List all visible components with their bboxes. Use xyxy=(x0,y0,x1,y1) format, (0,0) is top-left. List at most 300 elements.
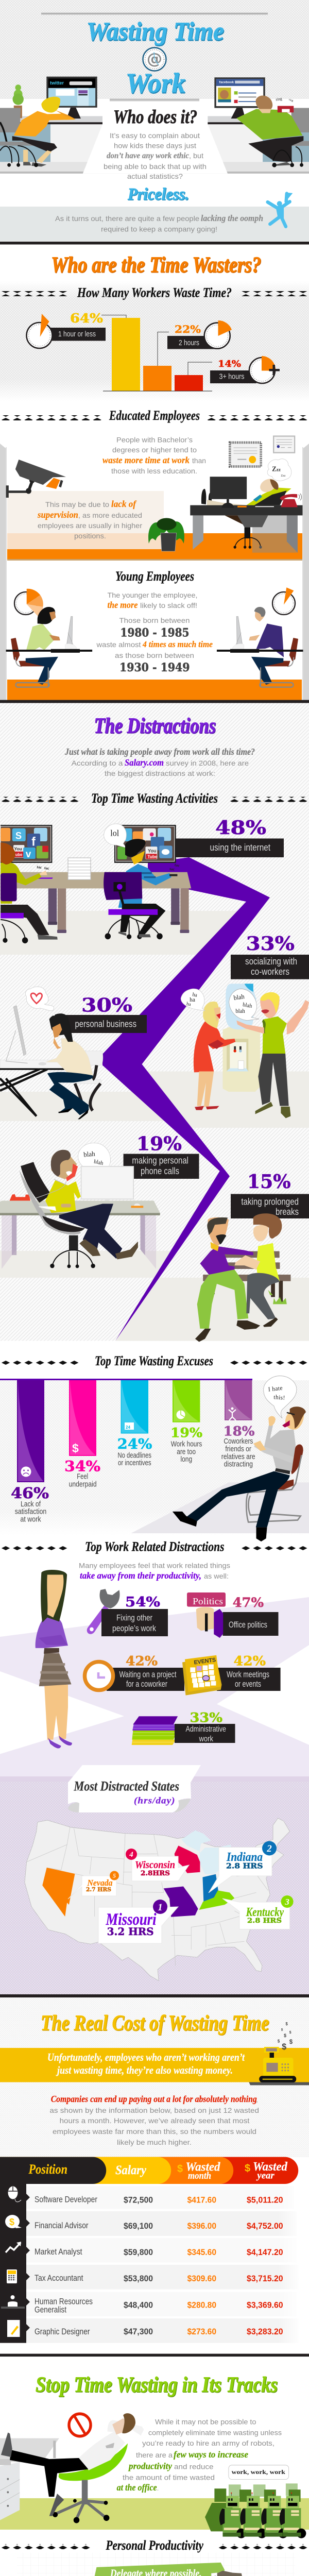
woman with yellow top xyxy=(234,1213,282,1330)
robots army xyxy=(205,2483,306,2538)
floor: orange xyxy=(7,491,302,561)
callout: Wisconsin: 2.8HRS xyxy=(141,1870,170,1877)
panel: oomph band: required to keep a company going! xyxy=(101,225,217,233)
stat: 54% fixing other people's work: Fixing other xyxy=(116,1613,152,1623)
stat: 15% prolonged breaks xyxy=(231,1171,309,1218)
row: Market Analyst: Market Analyst xyxy=(35,2247,82,2257)
man xyxy=(31,1150,138,1259)
table: cost of wasted time xyxy=(0,2157,301,2343)
older man's desk xyxy=(217,649,303,653)
Missouri xyxy=(164,1886,198,1917)
chair xyxy=(246,1445,303,1522)
stat: 19% phone calls: phone calls xyxy=(141,1166,179,1176)
text: companies pay out: likely be much higher. xyxy=(117,2138,192,2146)
icon: paper stack xyxy=(132,1716,178,1745)
text: younger employees: 4 times as much time xyxy=(142,639,213,649)
stat: 47% office politics: Politics xyxy=(193,1596,223,1606)
stat: 24% no deadlines: 24% xyxy=(117,1436,152,1452)
stat: 18% coworkers xyxy=(221,1423,255,1468)
stat: 19% phone calls: 19% xyxy=(136,1133,182,1155)
chair xyxy=(20,1162,95,1268)
left monitor: ube xyxy=(15,852,23,857)
floor: young employees xyxy=(7,680,302,700)
text: younger employees: The younger the employee, xyxy=(107,591,198,599)
icon: events calendar xyxy=(182,1655,222,1696)
row: Human Resources Generalist: $280.80 xyxy=(187,2300,216,2310)
sidebar icons: $ xyxy=(9,2217,14,2227)
sleeping man xyxy=(201,476,291,549)
stat: 24% no deadlines: or incentives xyxy=(118,1459,151,1467)
text: intro paragraph xyxy=(104,131,207,180)
row: Software Developer: Software Developer xyxy=(35,2194,97,2204)
water cooler xyxy=(222,984,260,1092)
text: intro paragraph: don’t have any work ethic xyxy=(107,151,189,160)
text: intro paragraph: actual statistics? xyxy=(127,172,183,180)
icon: cash register with dollars: $ xyxy=(289,2039,293,2045)
divider bar xyxy=(0,2354,309,2357)
label: 2 hours xyxy=(167,320,232,349)
stat: 33% administrative work: Administrative xyxy=(185,1725,226,1734)
man xyxy=(1,2413,144,2516)
text: robots paragraph: . xyxy=(157,2484,159,2492)
left worker xyxy=(1,842,58,943)
panel: yellow banner: just wasting time, they’re also wasting money. xyxy=(56,2064,233,2076)
background: lavender rays xyxy=(0,1597,309,1777)
left monitor: v xyxy=(26,849,31,860)
right monitor xyxy=(114,825,176,863)
icon: fist and cuff xyxy=(196,1607,223,1638)
Wisconsin xyxy=(175,1845,200,1873)
stat: 47% office politics: 47% xyxy=(233,1595,264,1610)
man xyxy=(173,1406,306,1541)
ribbon shapes xyxy=(48,2563,265,2576)
no sign xyxy=(69,2414,91,2436)
left monitor: You xyxy=(14,846,22,851)
text: lack of supervision: , as more educated xyxy=(78,511,142,519)
stat: 24% no deadlines: No deadlines xyxy=(117,1451,151,1460)
person: man on phone leaning on desk: ring xyxy=(288,98,294,103)
illustration: security camera, plant, sleeping manager xyxy=(6,436,302,553)
callout: Missouri: 1 xyxy=(158,1902,163,1913)
panel: oomph band xyxy=(0,207,309,241)
stat: 54% fixing other people's work: 54% xyxy=(125,1595,160,1610)
stat: 18% coworkers: friends or xyxy=(225,1445,251,1453)
illustration: woman on personal business xyxy=(0,987,103,1119)
text: distractions intro: Just what is taking people away from work all this time? xyxy=(64,747,255,757)
row: Graphic Designer: $47,300 xyxy=(124,2327,153,2336)
text: intro paragraph: , but xyxy=(189,151,203,160)
table header: Position xyxy=(28,2162,67,2177)
heading: Who does it?: Who does it? xyxy=(113,107,197,128)
text: intro paragraph: being able to back that up with xyxy=(104,162,207,171)
icon: cash register with dollars: $ xyxy=(286,2022,288,2026)
header panel xyxy=(0,0,309,99)
left monitor: f xyxy=(31,835,36,849)
left monitor: S xyxy=(15,830,22,841)
country outline xyxy=(25,1818,290,1981)
row: Human Resources Generalist: $48,400 xyxy=(124,2300,153,2310)
stat: 15% prolonged breaks: 15% xyxy=(247,1171,290,1193)
icon: cash register with dollars: $ xyxy=(278,2039,280,2043)
label: 1 hour or less xyxy=(27,314,106,348)
stat: 47% office politics: Office politics xyxy=(229,1620,267,1630)
row: Graphic Designer: $273.60 xyxy=(187,2327,216,2336)
row: Graphic Designer xyxy=(35,2327,283,2336)
speech bubble: I hate this xyxy=(264,1376,297,1418)
stat: 15% prolonged breaks: taking prolonged xyxy=(241,1196,299,1207)
stat: 34% feel underpaid: underpaid xyxy=(69,1480,97,1489)
speech bubble: lol xyxy=(104,824,126,848)
speech bubble: ha ha ha: ha xyxy=(190,996,196,1003)
monitor: facebook: facebook xyxy=(219,81,234,84)
stat: 33% socializing: co-workers xyxy=(251,967,289,977)
stat: 19% work hours xyxy=(170,1426,202,1464)
stat: 33% administrative work: 33% xyxy=(190,1710,222,1725)
icon: clock with small wedge xyxy=(272,587,295,615)
bar: 46% xyxy=(17,1380,44,1482)
bar: 64% xyxy=(112,318,140,391)
stat: 19% work hours: 19% xyxy=(170,1426,202,1440)
thought bubble: Zzz xyxy=(267,459,291,481)
bar chart: hours wasted xyxy=(27,311,280,391)
desk with stack of papers xyxy=(17,858,191,933)
right worker: tac xyxy=(174,862,180,868)
speech bubble: blah blah blah xyxy=(229,989,259,1021)
bar: 22% xyxy=(143,366,171,391)
callout: Kentucky: 3 xyxy=(284,1897,289,1907)
subheading: Personal Productivity: Personal Productivity xyxy=(106,2538,203,2553)
text: lack of supervision: This may be due to xyxy=(45,500,109,509)
desk xyxy=(0,1166,160,1269)
background: grid panel xyxy=(17,2553,295,2576)
row: Tax Accountant: $53,800 xyxy=(124,2274,153,2283)
text: younger employees: likely to slack off! xyxy=(140,601,197,609)
row: Financial Advisor: Financial Advisor xyxy=(35,2221,89,2230)
background: cost panel xyxy=(0,1997,309,2157)
section heading: The Real Cost of Wasting Time: The Real Cost of Wasting Time xyxy=(41,2012,269,2036)
stat: 18% coworkers: Coworkers xyxy=(224,1437,253,1446)
text: lack of supervision: employees are usually in higher xyxy=(38,521,142,530)
stat: 30% personal business: personal business xyxy=(75,1019,136,1029)
bar: 34% xyxy=(69,1380,96,1456)
table header: $ xyxy=(177,2163,183,2175)
callout: Nevada: 5 xyxy=(113,1872,116,1879)
icon: cash register with dollars: $ xyxy=(282,2042,286,2052)
callout: Missouri: 3.2 HRS xyxy=(107,1925,153,1938)
tips list xyxy=(48,2563,283,2576)
telephone xyxy=(280,494,301,507)
callout: Nevada xyxy=(68,1871,119,1899)
stat: 48% using the internet xyxy=(176,817,284,857)
panel: oomph band: lacking the oomph xyxy=(201,213,263,223)
stat: 33% administrative work: work xyxy=(199,1735,214,1743)
callout: Indiana xyxy=(209,1841,277,1893)
callout: Wisconsin: 4 xyxy=(129,1851,133,1859)
text: younger employees: the more xyxy=(107,600,138,610)
plant xyxy=(12,84,24,118)
callout: Nevada: Nevada xyxy=(87,1878,113,1888)
label: 1 hour or less: 1 hour or less xyxy=(58,330,96,338)
illustration: socializing at water cooler xyxy=(181,984,309,1118)
row: Financial Advisor: $69,100 xyxy=(124,2221,153,2231)
map panel background xyxy=(0,1776,309,1994)
table header: Wasted xyxy=(185,2161,220,2174)
background: distractions panel xyxy=(0,703,309,1341)
young woman's desk xyxy=(6,649,92,653)
row: Software Developer: $72,500 xyxy=(124,2195,153,2205)
speech bubble: blah blah blah: blah xyxy=(242,1002,253,1009)
text: distractions intro: According to a xyxy=(71,759,123,767)
title: Wasting Time: Wasting Time xyxy=(87,16,224,45)
text: robots paragraph: at the office xyxy=(117,2482,157,2493)
great lakes xyxy=(181,1831,232,1874)
text: companies pay out: employees waste far more than this, so the numbers would xyxy=(53,2127,256,2136)
speech bubble: blah blah: blah xyxy=(83,1149,96,1159)
callout: Wisconsin xyxy=(126,1849,189,1881)
subheading: Top Time Wasting Activities xyxy=(0,791,309,806)
illustration: angry man on chair xyxy=(173,1376,306,1541)
callout: Missouri xyxy=(98,1900,178,1943)
text: distractions intro: the biggest distractions at work: xyxy=(105,769,215,777)
certificates xyxy=(230,436,295,466)
text: younger employees: as those born between xyxy=(115,651,194,659)
row: Tax Accountant: Tax Accountant xyxy=(35,2273,83,2283)
row: Tax Accountant xyxy=(35,2273,283,2283)
stat: 42% work meetings: 42% xyxy=(234,1654,266,1668)
bar: 34%: $ xyxy=(72,1442,79,1455)
plant xyxy=(148,518,184,551)
stat: 19% phone calls xyxy=(124,1133,199,1179)
table header: Wasted xyxy=(253,2160,288,2174)
stat: 18% coworkers: relatives are xyxy=(221,1452,255,1461)
young woman xyxy=(11,607,77,687)
bar: 24%: 24 xyxy=(126,1425,130,1430)
speech bubble: blah blah blah: blah xyxy=(233,993,245,1002)
row: Human Resources Generalist: Human Resources xyxy=(35,2297,93,2306)
panel: oomph band: As it turns out, there are quite a few people xyxy=(55,214,199,223)
stat: 18% coworkers: 18% xyxy=(224,1423,255,1438)
floors behind distractions scenes xyxy=(0,911,309,1341)
row: Market Analyst: $345.60 xyxy=(187,2247,216,2257)
row: Tax Accountant: $309.60 xyxy=(187,2274,216,2283)
text: lack of supervision xyxy=(37,499,142,540)
older man xyxy=(232,607,298,687)
Kentucky xyxy=(199,1890,234,1910)
row: Human Resources Generalist: $3,369.60 xyxy=(247,2300,283,2310)
chair xyxy=(53,2444,128,2523)
illustration: office scene with two slackers xyxy=(0,77,309,174)
row: Market Analyst xyxy=(35,2247,283,2257)
speech bubble: I hate this: this! xyxy=(273,1394,285,1401)
stat: 34% feel underpaid: Feel xyxy=(77,1472,88,1481)
text: work-related intro: as well: xyxy=(204,1572,229,1580)
man in green t-shirt xyxy=(236,992,309,1118)
background: excuses crosshatch xyxy=(0,1380,309,1535)
Indiana xyxy=(202,1874,218,1902)
right worker xyxy=(104,839,180,939)
desk xyxy=(190,477,302,553)
text: intro paragraph: how kids these days just xyxy=(114,141,196,149)
stat: 46% lack of satisfaction: satisfaction xyxy=(15,1507,46,1516)
bar: 14% xyxy=(175,375,203,391)
side walls of room xyxy=(0,444,309,700)
stat: 48% using the internet: 48% xyxy=(215,817,266,839)
text: distractions intro: survey in 2008, here are xyxy=(166,759,249,767)
text: intro paragraph: It’s easy to complain about xyxy=(110,131,200,140)
subheading: Top Time Wasting Excuses xyxy=(0,1353,309,1368)
speech bubble: lol: lol xyxy=(110,828,119,838)
left worker: tac xyxy=(44,866,50,871)
illustration: two people on a bench xyxy=(195,1213,290,1342)
stat: 46% lack of satisfaction: 46% xyxy=(11,1484,49,1502)
center white panel xyxy=(83,99,228,174)
row: Graphic Designer: $3,283.20 xyxy=(247,2327,283,2336)
text: companies pay out: Companies can end up paying out a lot for absolutely nothing xyxy=(51,2094,257,2104)
stat: 15% prolonged breaks: breaks xyxy=(276,1207,299,1217)
text: robots paragraph: While it may not be possible to xyxy=(155,2418,256,2426)
icon: clock with fanned wedges xyxy=(14,589,43,618)
row: Human Resources Generalist: Generalist xyxy=(35,2304,66,2314)
stat: 54% fixing other people's work: people’s work xyxy=(112,1623,156,1633)
value: 64%: 64% xyxy=(70,311,103,326)
thought bubble: heart xyxy=(25,987,55,1016)
callout: Indiana: 2.8 HRS xyxy=(226,1862,263,1871)
speech bubble: blah blah blah: blah xyxy=(235,1008,245,1014)
table header xyxy=(0,2157,298,2184)
callout: Missouri: Missouri xyxy=(106,1910,157,1929)
text: robots paragraph: and reduce xyxy=(174,2463,214,2471)
background: hatch panel behind bars xyxy=(0,281,309,401)
woman xyxy=(45,1013,93,1119)
callout: Indiana: Indiana xyxy=(226,1851,263,1864)
subheading: Top Time Wasting Activities: Top Time Wasting Activities xyxy=(91,791,218,806)
text: bachelor's paragraph xyxy=(102,435,206,475)
banner: Most Distracted States: (hrs/day) xyxy=(134,1795,176,1806)
text: robots paragraph: completely eliminate time wasting unless xyxy=(148,2429,282,2437)
woman in red dress xyxy=(194,1002,235,1110)
stat: 42% waiting on a project: for a coworker xyxy=(126,1679,167,1689)
stat: 46% lack of satisfaction: at work xyxy=(20,1515,41,1524)
row: Financial Advisor: $4,752.00 xyxy=(247,2221,283,2231)
callout: Kentucky: Kentucky xyxy=(246,1906,284,1919)
stat: 54% fixing other people's work xyxy=(87,1589,168,1636)
left monitor xyxy=(1,825,52,863)
text: distractions intro: Salary.com xyxy=(125,757,164,768)
stat: 42% work meetings: Work meetings xyxy=(227,1669,269,1679)
icon: cash register with dollars: $ xyxy=(281,2028,283,2031)
text: younger employees: 1930 - 1949 xyxy=(119,661,190,674)
row: Graphic Designer: Graphic Designer xyxy=(35,2327,90,2336)
stat: 33% socializing xyxy=(231,933,309,979)
speech bubble: blah blah: blah xyxy=(93,1158,104,1166)
speech bubble: work, work, work xyxy=(229,2465,289,2480)
illustration: man on phone with feet out xyxy=(0,1143,160,1269)
stat: 18% coworkers: distracting xyxy=(224,1460,253,1468)
callout: Kentucky xyxy=(222,1895,294,1929)
table header: month xyxy=(188,2171,211,2181)
stat: 33% socializing: 33% xyxy=(246,933,295,955)
bar: 18% xyxy=(225,1380,252,1420)
row: Market Analyst: $4,147.20 xyxy=(247,2247,283,2257)
illustration: workers at computers xyxy=(1,824,191,943)
stat: 46% lack of satisfaction xyxy=(11,1484,49,1524)
thought bubble: Zzz: Zzz xyxy=(272,465,281,473)
right monitor: You xyxy=(148,848,157,853)
banner: Most Distracted States xyxy=(68,1765,201,1812)
person: man on phone leaning on desk xyxy=(236,95,309,167)
text: companies pay out xyxy=(49,2094,259,2146)
chair xyxy=(73,1051,103,1111)
subheading: Educated Employees: Educated Employees xyxy=(109,408,200,423)
map of United States xyxy=(25,1818,290,1981)
stat: 30% personal business: 30% xyxy=(81,995,132,1016)
text: bachelor's paragraph: waste more time at work xyxy=(102,455,190,465)
banner: Most Distracted States: Most Distracted States xyxy=(74,1779,179,1794)
text: younger employees xyxy=(96,591,213,674)
label: 2 hours: 2 hours xyxy=(179,338,199,347)
value: 22%: 22% xyxy=(175,323,201,335)
row: Software Developer: $5,011.20 xyxy=(247,2195,283,2205)
stat: 42% work meetings: or events xyxy=(235,1679,261,1689)
monitor: twitter xyxy=(46,77,97,118)
divider bar xyxy=(0,242,309,244)
subheading: Top Work Related Distractions: Top Work Related Distractions xyxy=(85,1539,225,1554)
right monitor: Tube xyxy=(147,854,158,859)
text: companies pay out: , xyxy=(256,2095,258,2104)
desk and monitor xyxy=(0,1006,76,1116)
heading: Priceless: Priceless. xyxy=(127,185,189,204)
stat: 19% phone calls: making personal xyxy=(132,1156,188,1166)
text: robots paragraph: the amount of time wasted xyxy=(123,2473,215,2482)
text: bachelor's paragraph: degrees or higher tend to xyxy=(112,446,197,454)
callout: Indiana: 2 xyxy=(266,1843,272,1854)
stat: 19% work hours: long xyxy=(180,1455,192,1464)
panel: yellow banner: Unfortunately, employees who aren’t working aren’t xyxy=(47,2051,245,2063)
bar: 19% xyxy=(173,1380,200,1422)
speech bubble: ha ha ha: ha xyxy=(192,992,198,998)
text: work-related intro: Many employees feel that work related things xyxy=(79,1561,230,1569)
text: robots paragraph: there are a xyxy=(136,2451,173,2459)
stat: 46% lack of satisfaction: Lack of xyxy=(21,1500,41,1509)
text: companies pay out: hours a month. However, we’ve already seen that most xyxy=(60,2116,250,2125)
stat: 19% work hours: are too xyxy=(177,1447,196,1456)
subheading: Personal Productivity xyxy=(0,2538,309,2553)
row: Human Resources Generalist xyxy=(35,2297,283,2314)
text: younger employees: waste almost xyxy=(96,640,141,649)
subheading: How Many Workers Waste Time? xyxy=(0,285,309,300)
icon: at-sign clock: @ xyxy=(147,50,162,68)
text: lack of supervision: positions. xyxy=(74,532,106,540)
icon: jumping figure with flag xyxy=(268,193,293,227)
title: Work: Work xyxy=(126,67,185,98)
value: 14%: 14% xyxy=(218,359,241,369)
row: Tax Accountant: $3,715.20 xyxy=(247,2274,283,2283)
text: younger employees: 1980 - 1985 xyxy=(121,626,190,640)
stat: 34% feel underpaid: 34% xyxy=(64,1458,100,1475)
label: 3+ hours xyxy=(210,356,280,383)
tip icons xyxy=(57,2571,283,2576)
floor: olive xyxy=(0,2498,309,2530)
thought bubble: Zzz: Zzz xyxy=(281,474,286,478)
Nevada xyxy=(42,1868,75,1917)
bench xyxy=(203,1251,290,1304)
text: robots paragraph: you’re ready to hire an army of robots, xyxy=(142,2439,274,2447)
subheading: Young Employees: Young Employees xyxy=(115,569,194,584)
subheading: Educated Employees xyxy=(0,408,309,423)
speech bubble: ha ha ha: ha xyxy=(186,1002,192,1008)
speech bubble: ha ha ha xyxy=(181,989,205,1011)
illustration: young employees at desks xyxy=(6,607,303,687)
